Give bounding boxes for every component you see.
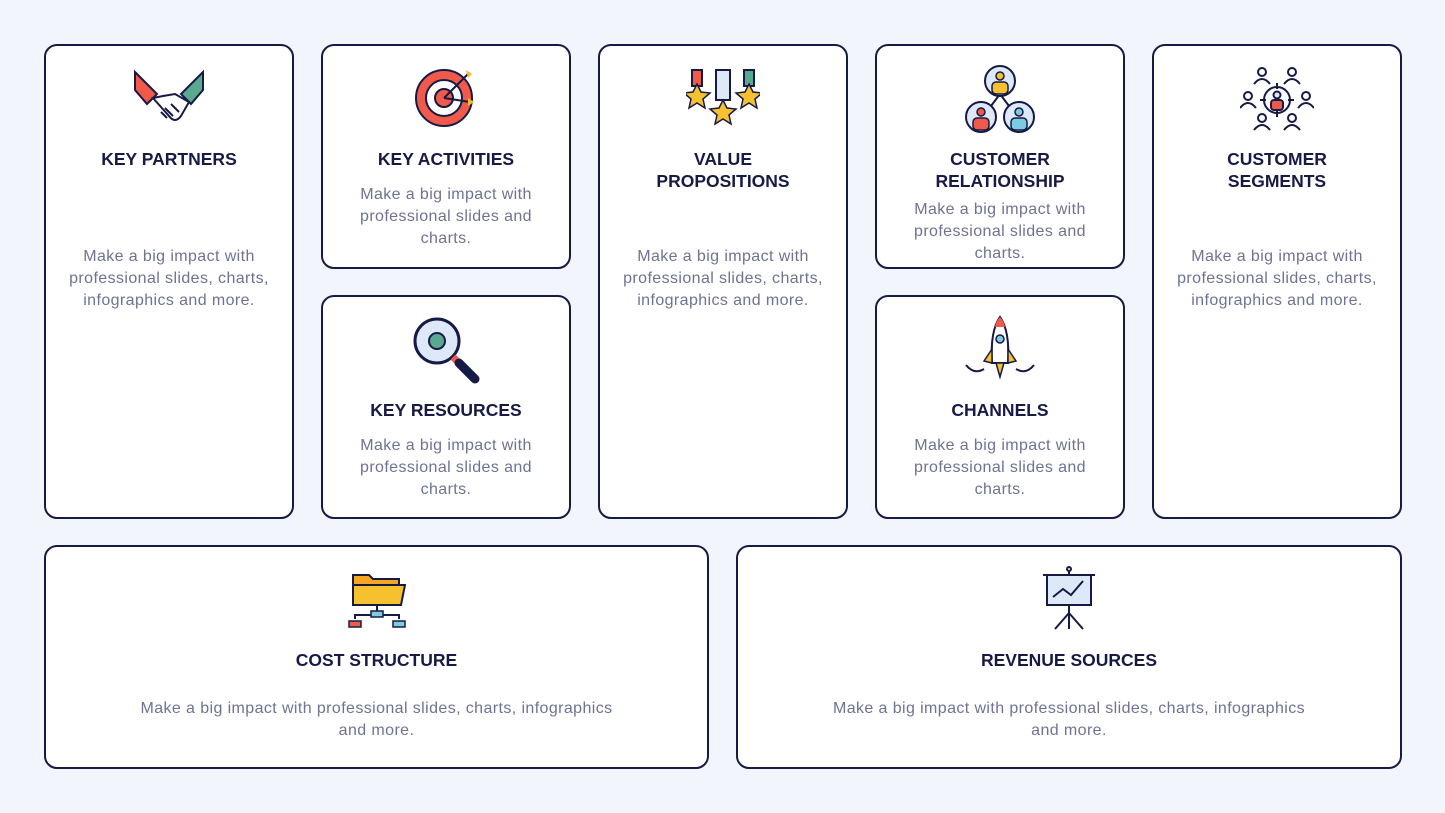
text: Make a big impact with professional slides and charts.	[914, 437, 1086, 498]
heading: CUSTOMER	[950, 149, 1050, 169]
icon: people network	[965, 65, 1035, 133]
text: Make a big impact with professional slides, charts, infographics and more.	[833, 700, 1305, 739]
heading: RELATIONSHIP	[936, 171, 1064, 191]
panel: key resources	[321, 295, 571, 519]
panel: key partners	[44, 44, 294, 519]
heading: COST STRUCTURE	[296, 650, 457, 670]
icon: handshake	[134, 70, 204, 121]
heading: SEGMENTS	[1228, 171, 1326, 191]
icon: target	[415, 69, 474, 127]
icon: folder tree	[348, 574, 406, 628]
icon: crowd target	[1240, 67, 1314, 131]
heading: VALUE	[694, 149, 752, 169]
text: Make a big impact with professional slides, charts, infographics and more.	[140, 700, 613, 739]
icon: magnifier	[414, 318, 480, 384]
heading: CUSTOMER	[1227, 149, 1327, 169]
heading: CHANNELS	[951, 400, 1049, 420]
icon: medals	[686, 69, 760, 126]
heading: KEY ACTIVITIES	[378, 149, 514, 169]
heading: KEY PARTNERS	[101, 149, 237, 169]
text: Make a big impact with professional slides, charts, infographics and more.	[69, 248, 269, 309]
panel: revenue sources	[736, 545, 1402, 769]
panel: channels	[875, 295, 1125, 519]
text: Make a big impact with professional slides and charts.	[360, 186, 532, 247]
heading	[936, 149, 1064, 191]
heading: REVENUE SOURCES	[981, 650, 1157, 670]
text: Make a big impact with professional slides, charts, infographics and more.	[623, 248, 823, 309]
panel: customer segments	[1152, 44, 1402, 519]
icon: rocket	[965, 315, 1035, 380]
icon: chart easel	[1043, 566, 1095, 630]
heading: KEY RESOURCES	[370, 400, 522, 420]
heading	[656, 149, 790, 191]
panel: cost structure	[44, 545, 709, 769]
heading	[1227, 149, 1327, 191]
text: Make a big impact with professional slides, charts, infographics and more.	[1177, 248, 1377, 309]
text: Make a big impact with professional slides and charts.	[914, 201, 1086, 262]
heading: PROPOSITIONS	[656, 171, 790, 191]
panel: value propositions	[598, 44, 848, 519]
text: Make a big impact with professional slides and charts.	[360, 437, 532, 498]
panel: customer relationship	[875, 44, 1125, 269]
panel: key activities	[321, 44, 571, 269]
